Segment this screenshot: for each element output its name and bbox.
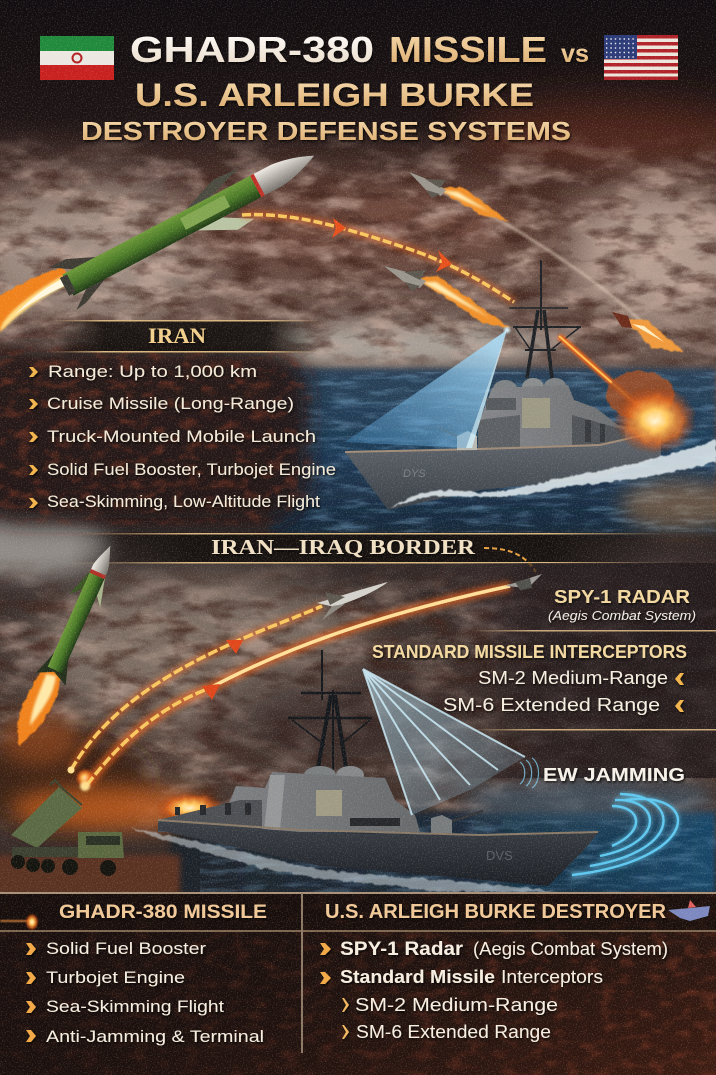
truck launcher [11, 780, 124, 876]
label: EW jamming: EW JAMMING [543, 765, 685, 785]
label: SPY-1 radar [548, 587, 696, 623]
mast [509, 260, 581, 378]
truck body [12, 847, 82, 857]
icon: small destroyer [668, 900, 710, 921]
panel: Iran header [50, 320, 320, 352]
item: SPY-1 radar [320, 939, 668, 960]
label: EW jamming [520, 758, 685, 788]
panel: Iran backdrop [0, 345, 320, 525]
item: turbojet: Turbojet Engine [46, 968, 185, 987]
bottom comparison panel [0, 892, 716, 1075]
bullet: cruise: Cruise Missile (Long-Range) [47, 394, 294, 413]
item: solid fuel: Solid Fuel Booster [46, 939, 206, 958]
icon: Iran flag [40, 36, 114, 80]
title block [81, 29, 589, 146]
wake [390, 440, 716, 508]
title line two: U.S. ARLEIGH BURKE [135, 77, 534, 113]
list: Ghadr-380 features [26, 939, 264, 1046]
heading: Ghadr-380 column: GHADR-380 MISSILE [59, 902, 267, 923]
item: SPY-1 radar: SPY-1 Radar [340, 939, 464, 960]
sea: lower scene [170, 778, 716, 894]
bullet: launch: Truck-Mounted Mobile Launch [47, 427, 316, 446]
ship: upper destroyer [345, 260, 716, 510]
missile: cruise mid [384, 266, 510, 328]
label: standard missile interceptors [372, 642, 687, 715]
item: anti-jamming: Anti-Jamming & Terminal [46, 1027, 264, 1046]
item: standard missile: Standard Missile [340, 967, 495, 987]
missile: large green Ghadr-380 [0, 133, 328, 345]
jamming arcs small [520, 758, 539, 788]
superstructure [158, 766, 420, 832]
radar beam: upper ship [345, 327, 510, 448]
title line one: MISSILE [389, 29, 547, 70]
panel: border band: IRAN—IRAQ BORDER [211, 535, 476, 559]
label: standard missile interceptors: STANDARD MISSILE INTERCEPTORS [372, 642, 687, 662]
item: SPY-1 radar: (Aegis Combat System) [473, 939, 668, 959]
sea: upper scene [270, 368, 716, 534]
hull [158, 820, 598, 886]
panel: Iran bullet list [29, 362, 336, 511]
ship: lower destroyer [130, 650, 598, 892]
title line one [130, 29, 589, 70]
label: SPY-1 radar: (Aegis Combat System) [548, 608, 696, 623]
launcher box [11, 787, 82, 848]
title line one: GHADR-380 [130, 29, 374, 70]
item: SM-6: SM-6 Extended Range [356, 1022, 551, 1042]
icon: US flag [604, 35, 678, 80]
heading: destroyer column: U.S. ARLEIGH BURKE DESTROYER [325, 901, 667, 923]
trajectory: dashed arc to ship [242, 215, 514, 302]
wake [130, 828, 560, 892]
missile: mid cruise, lower scene [317, 582, 388, 620]
item: SM-6: SM-6 Extended Range [443, 695, 660, 715]
item: standard missile [320, 967, 603, 987]
missile: launched, lower left [17, 538, 125, 745]
gun [431, 811, 483, 833]
bullet: propulsion: Solid Fuel Booster, Turbojet Engine [47, 460, 336, 479]
item: SM-2: SM-2 Medium-Range [478, 668, 668, 688]
panel: Iran header: IRAN [148, 323, 206, 348]
hull [345, 431, 661, 510]
panel: right defense backdrop [440, 563, 716, 778]
interceptor beam and explosion: upper ship [559, 336, 697, 454]
item: SM-2: SM-2 Medium-Range [355, 995, 558, 1015]
radar beams: lower ship [363, 669, 525, 815]
gun [439, 428, 477, 450]
wheels [11, 855, 116, 876]
arrow: border pointer [484, 548, 536, 572]
item: standard missile: Interceptors [501, 967, 603, 987]
missile: cruise upper right [409, 172, 650, 330]
list: destroyer features [320, 939, 668, 1042]
background sky and clouds [0, 70, 716, 892]
missile: small right [612, 312, 684, 352]
mast [288, 650, 372, 770]
smoke and ground fire, lower left [0, 714, 224, 897]
bullet: flight: Sea-Skimming, Low-Altitude Flight [47, 492, 320, 511]
superstructure [478, 378, 650, 452]
label: SPY-1 radar: SPY-1 RADAR [554, 587, 690, 607]
trajectory: launch arc one [68, 606, 322, 774]
title line three: DESTROYER DEFENSE SYSTEMS [81, 116, 571, 146]
hull number: DYS [403, 468, 426, 480]
panel: border band [70, 533, 670, 564]
icon: jamming rings [572, 794, 678, 875]
bullet: range: Range: Up to 1,000 km [48, 362, 257, 381]
hull number: DVS [486, 848, 513, 863]
trajectory: launch arc two [80, 586, 510, 791]
item: sea-skimming: Sea-Skimming Flight [46, 997, 224, 1016]
title line one: vs [561, 40, 589, 68]
icon: missile flare [0, 913, 39, 931]
missile: lead cruise, right [505, 574, 542, 590]
